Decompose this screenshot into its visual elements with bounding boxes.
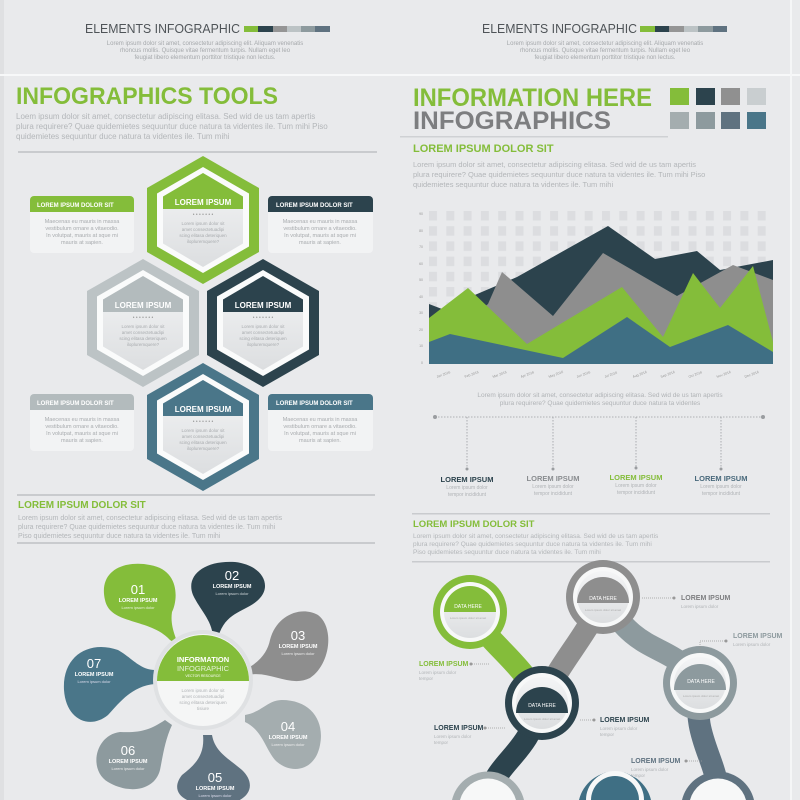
side box: top left green: [30, 196, 134, 253]
center circle: INFOGRAPHIC: [177, 664, 230, 673]
connectors: [470, 612, 542, 703]
hex: gray left: [87, 259, 199, 387]
timeline label 2: Lorem ipsum dolor: [532, 484, 574, 490]
chain labels: Lorem ipsum dolor: [419, 670, 457, 675]
hex: gray left: scing elitasa deteriquen: [119, 336, 167, 341]
side box: bottom right teal: Maecenas eu mauris in massa: [283, 417, 358, 423]
petal 03: LOREM IPSUM: [279, 644, 318, 650]
chain labels: LOREM IPSUM: [434, 725, 484, 732]
petal 03: Lorem ipsum dolor: [281, 651, 315, 656]
circle: green data here: [433, 575, 507, 649]
header: left elements infographic: [85, 22, 330, 61]
timeline label 4: tempor incididunt: [702, 491, 741, 497]
timeline label 4: LOREM IPSUM: [695, 474, 747, 483]
area chart: 90: [419, 212, 423, 216]
hex: green top: amet consectetuadipi: [182, 227, 224, 232]
chain labels: Lorem ipsum dolor: [733, 642, 771, 647]
area chart: [419, 211, 775, 379]
colour swatches: [670, 88, 766, 129]
side box: bottom right teal: mauris at sapien.: [299, 438, 341, 444]
area chart: 60: [419, 262, 423, 266]
timeline label 1: tempor incididunt: [448, 492, 487, 498]
area chart: 10: [419, 344, 423, 348]
timeline label 3: tempor incididunt: [617, 490, 656, 496]
side box: bottom left gray: LOREM IPSUM DOLOR SIT: [37, 401, 114, 407]
petal 05: [177, 735, 250, 800]
header: right elements infographic: rhoncus mollis. Quisque vitae fermentum turpis. Nullam eget leo: [520, 48, 691, 54]
side box: bottom left gray: vestibulum ornare a vitaeodio.: [45, 424, 119, 430]
text block: right lorem ipsum dolor sit: plura requirere? Quae quidemietes sequuntur duce natura ta videntes ile. Tum mihi Piso: [413, 170, 705, 179]
petal 07: 07: [87, 656, 101, 671]
petal 06: [96, 720, 172, 789]
hex: green top: ilopluremquere?: [187, 239, 220, 244]
center circle: [153, 630, 253, 730]
text block: right second lorem: plura requirere? Quae quidemietes sequuntur duce natura ta videntes ile. Tum mihi: [413, 541, 652, 548]
side box: bottom left gray: [30, 394, 134, 451]
area chart: Nov 2016: [716, 370, 731, 379]
hex: dark right: • • • • • • •: [253, 315, 274, 321]
title: infographics tools: plura requirere? Quae quidemietes sequuntur duce natura ta videntes ile. Tum mihi Piso: [16, 122, 328, 131]
area chart: 40: [419, 295, 423, 299]
center circle: Lorem ipsum dolor sit: [181, 688, 225, 693]
circle: green data here: DATA HERE: [454, 604, 482, 610]
hex: teal bottom: LOREM IPSUM: [175, 405, 232, 414]
chain labels: LOREM IPSUM: [733, 633, 783, 640]
text block: left lorem ipsum dolor sit: Lorem ipsum dolor sit amet, consectetur adipiscing elitasa. Sed wid de us tam apertis: [18, 515, 283, 522]
hex: gray left: LOREM IPSUM: [115, 301, 172, 310]
side box: bottom right teal: vestibulum ornare a vitaeodio.: [283, 424, 357, 430]
petal 01: LOREM IPSUM: [119, 598, 158, 604]
petal 07: [64, 647, 155, 722]
timeline label 3: Lorem ipsum dolor: [615, 483, 657, 489]
petal 04: [245, 700, 321, 769]
petal 05: 05: [208, 770, 222, 785]
petal 04: LOREM IPSUM: [269, 735, 308, 741]
header: right elements infographic: Lorem ipsum dolor sit amet, consectetur adipiscing elit. Aliquam venenatis: [507, 41, 703, 47]
timeline label 3: LOREM IPSUM: [610, 473, 662, 482]
area chart: 70: [419, 245, 423, 249]
circle: gray data here: DATA HERE: [589, 596, 617, 602]
chain labels: LOREM IPSUM: [419, 661, 469, 668]
circle: gray data here: [566, 560, 640, 634]
chain labels: [419, 595, 783, 778]
title: infographics tools: INFOGRAPHICS TOOLS: [16, 83, 278, 110]
chain labels: tempor: [631, 773, 646, 778]
hex: teal bottom: Lorem ipsum dolor sit: [181, 428, 225, 433]
hex: gray left: • • • • • • •: [133, 315, 154, 321]
timeline label 4: [695, 474, 747, 497]
text block: left lorem ipsum dolor sit: LOREM IPSUM DOLOR SIT: [18, 500, 146, 511]
timeline label 2: [527, 474, 579, 497]
hex: gray left: Lorem ipsum dolor sit: [121, 324, 165, 329]
side box: top right dark: vestibulum ornare a vitaeodio.: [283, 226, 357, 232]
title: information here infographics: INFORMATION HERE: [413, 84, 652, 112]
side box: bottom right teal: LOREM IPSUM DOLOR SIT: [276, 401, 353, 407]
circle: slate data here: DATA HERE: [687, 679, 715, 685]
chain labels: LOREM IPSUM: [631, 758, 681, 765]
petal 02: 02: [225, 568, 239, 583]
hex: green top: scing elitasa deteriquen: [179, 233, 227, 238]
circle: dark data here: [505, 666, 579, 740]
side box: bottom right teal: In volutpat, mauris at sque mi: [284, 431, 356, 437]
timeline label 2: tempor incididunt: [534, 491, 573, 497]
petal 03: 03: [291, 628, 305, 643]
petal flower diagram: [64, 562, 328, 800]
hex: green top: Lorem ipsum dolor sit: [181, 221, 225, 226]
area chart: Jan 2016: [436, 370, 451, 379]
circle: dark data here: Lorem ipsum dolor sit amet: [524, 717, 560, 721]
timeline label 2: LOREM IPSUM: [527, 474, 579, 483]
chain labels: Lorem ipsum dolor: [600, 726, 638, 731]
text block: left lorem ipsum dolor sit: [18, 500, 283, 540]
hex: teal bottom: • • • • • • •: [193, 419, 214, 425]
petal 01: 01: [131, 582, 145, 597]
hex: green top: • • • • • • •: [193, 212, 214, 218]
chain labels: tempor: [600, 732, 615, 737]
side box: top right dark: Maecenas eu mauris in massa: [283, 219, 358, 225]
petal 05: Lorem ipsum dolor: [198, 793, 232, 798]
center circle: amet consectetuadipi: [182, 694, 224, 699]
petal 01: Lorem ipsum dolor: [121, 605, 155, 610]
area chart: 20: [419, 328, 423, 332]
timeline label 1: Lorem ipsum dolor: [446, 485, 488, 491]
text block: right lorem ipsum dolor sit: Lorem ipsum dolor sit amet, consectetur adipiscing elitasa. Sed wid de us tam apertis: [413, 160, 696, 169]
header: left elements infographic: ELEMENTS INFOGRAPHIC: [85, 22, 240, 36]
hex: dark right: LOREM IPSUM: [235, 301, 292, 310]
timeline label 4: Lorem ipsum dolor: [700, 484, 742, 490]
chain labels: Lorem ipsum dolor: [434, 734, 472, 739]
area chart: Oct 2016: [688, 370, 703, 379]
chain labels: LOREM IPSUM: [600, 717, 650, 724]
text block: left lorem ipsum dolor sit: plura requirere? Quae quidemietes sequuntur duce natura ta videntes ile. Tum mihi: [18, 524, 276, 531]
center circle: INFORMATION: [177, 655, 229, 664]
chain labels: Lorem ipsum dolor: [631, 767, 669, 772]
text block: right lorem ipsum dolor sit: quidemietes sequuntur duce natura ta videntes ile. Tum mihi: [413, 180, 613, 189]
title: information here infographics: INFOGRAPHICS: [413, 107, 611, 135]
chart caption: plura requirere? Quae quidemietes sequuntur duce natura ta videntes: [500, 400, 701, 407]
area chart: May 2016: [548, 370, 564, 379]
petal 06: LOREM IPSUM: [109, 759, 148, 765]
text block: right second lorem: Piso quidemietes sequuntur duce natura ta videntes ile. Tum mihi: [413, 549, 601, 556]
chart caption: [477, 392, 723, 407]
hex: gray left: ilopluremquere?: [127, 342, 160, 347]
title: infographics tools: [16, 83, 328, 141]
text block: right lorem ipsum dolor sit: LOREM IPSUM DOLOR SIT: [413, 143, 554, 155]
circle: slate data here: Lorem ipsum dolor sit amet: [683, 694, 719, 698]
center circle: tisiure: [197, 706, 209, 711]
title: information here infographics: [413, 84, 652, 135]
chain labels: LOREM IPSUM: [681, 595, 731, 602]
side box: top left green: Maecenas eu mauris in massa: [45, 219, 120, 225]
area chart: Sep 2016: [660, 370, 675, 379]
hex: teal bottom: ilopluremquere?: [187, 446, 220, 451]
hex: dark right: Lorem ipsum dolor sit: [241, 324, 285, 329]
area chart: 80: [419, 229, 423, 233]
petal 01: [104, 564, 178, 645]
petal 06: Lorem ipsum dolor: [111, 766, 145, 771]
hexagon diagram: [87, 156, 319, 491]
side box: top right dark: [268, 196, 373, 253]
circle: green data here: Lorem ipsum dolor sit amet: [450, 616, 486, 620]
side box: top right dark: LOREM IPSUM DOLOR SIT: [276, 203, 353, 209]
area chart: Apr 2016: [520, 370, 535, 379]
side box: top left green: mauris at sapien.: [61, 240, 103, 246]
side box: bottom left gray: mauris at sapien.: [61, 438, 103, 444]
hex: teal bottom: scing elitasa deteriquen: [179, 440, 227, 445]
chain diagram: [419, 560, 783, 800]
hex: dark right: amet consectetuadipi: [242, 330, 284, 335]
petal 07: LOREM IPSUM: [75, 672, 114, 678]
circle: dark data here: DATA HERE: [528, 703, 556, 709]
title: infographics tools: quidemietes sequuntur duce natura ta videntes ile. Tum mihi: [16, 132, 230, 141]
timeline label 1: LOREM IPSUM: [441, 475, 493, 484]
hex: green top: LOREM IPSUM: [175, 198, 232, 207]
area chart: Jun 2016: [576, 370, 591, 379]
petal 05: LOREM IPSUM: [196, 786, 235, 792]
petal 03: [248, 611, 328, 681]
side box: bottom left gray: In volutpat, mauris at sque mi: [46, 431, 118, 437]
hex: dark right: ilopluremquere?: [247, 342, 280, 347]
header: right elements infographic: ELEMENTS INFOGRAPHIC: [482, 22, 637, 36]
circles: bottom partial: [452, 771, 754, 800]
area chart: Aug 2016: [632, 370, 647, 379]
timeline: [433, 415, 765, 498]
text block: right lorem ipsum dolor sit: [413, 143, 705, 189]
hex: dark right: [207, 259, 319, 387]
petal 02: [191, 562, 265, 638]
petal 02: Lorem ipsum dolor: [215, 591, 249, 596]
side box: bottom left gray: Maecenas eu mauris in massa: [45, 417, 120, 423]
center circle: VECTOR RESOURCE: [185, 674, 221, 678]
header: right elements infographic: feugiat libero elementum porttitor tristique non lectus.: [534, 55, 676, 61]
chain labels: tempor: [419, 676, 434, 681]
side box: top left green: vestibulum ornare a vitaeodio.: [45, 226, 119, 232]
petal 04: Lorem ipsum dolor: [271, 742, 305, 747]
header: left elements infographic: feugiat libero elementum porttitor tristique non lectus.: [134, 55, 276, 61]
header: right elements infographic: [482, 22, 727, 61]
area chart: 0: [421, 361, 423, 365]
circle: gray data here: Lorem ipsum dolor sit amet: [585, 608, 621, 612]
chart caption: Lorem ipsum dolor sit amet, consectetur adipiscing elitasa. Sed wid de us tam apertis: [477, 392, 723, 399]
side box: bottom right teal: [268, 394, 373, 451]
title: infographics tools: Loem ipsum dolor sit amet, consectetur adipiscing elitasa. Sed wid de us tam apertis: [16, 112, 315, 121]
hex: green top: [147, 156, 259, 284]
chain labels: tempor: [434, 740, 449, 745]
area chart: Feb 2016: [464, 370, 479, 379]
timeline label 3: [610, 473, 662, 496]
text block: left lorem ipsum dolor sit: Piso quidemietes sequuntur duce natura ta videntes ile. Tum mihi: [18, 533, 221, 540]
area chart: Mar 2016: [492, 370, 507, 379]
text block: right second lorem: [413, 519, 659, 556]
petal 04: 04: [281, 719, 295, 734]
area chart: Jul 2016: [604, 371, 618, 379]
petal 07: Lorem ipsum dolor: [77, 679, 111, 684]
header: left elements infographic: Lorem ipsum dolor sit amet, consectetur adipiscing elit. Aliquam venenatis: [107, 41, 303, 47]
text block: right second lorem: Lorem ipsum dolor sit amet, consectetur adipiscing elitasa. Sed wid de us tam apertis: [413, 533, 659, 540]
text block: right second lorem: LOREM IPSUM DOLOR SIT: [413, 519, 535, 530]
chain labels: Lorem ipsum dolor: [681, 604, 719, 609]
side box: top left green: LOREM IPSUM DOLOR SIT: [37, 203, 114, 209]
hex: dark right: scing elitasa deteriquen: [239, 336, 287, 341]
hex: teal bottom: [147, 363, 259, 491]
hex: gray left: amet consectetuadipi: [122, 330, 164, 335]
petal 06: 06: [121, 743, 135, 758]
header: left elements infographic: rhoncus mollis. Quisque vitae fermentum turpis. Nullam eget leo: [120, 48, 291, 54]
side box: top right dark: mauris at sapien.: [299, 240, 341, 246]
hex: teal bottom: amet consectetuadipi: [182, 434, 224, 439]
area chart: Dec 2016: [744, 370, 759, 379]
circle: slate data here: [663, 646, 737, 720]
side box: top right dark: In volutpat, mauris at sque mi: [284, 233, 356, 239]
petal 02: LOREM IPSUM: [213, 584, 252, 590]
center circle: scing elitasa deteriquen: [179, 700, 227, 705]
area chart: 30: [419, 311, 423, 315]
timeline label 1: [441, 475, 493, 498]
side box: top left green: In volutpat, mauris at sque mi: [46, 233, 118, 239]
area chart: 50: [419, 278, 423, 282]
